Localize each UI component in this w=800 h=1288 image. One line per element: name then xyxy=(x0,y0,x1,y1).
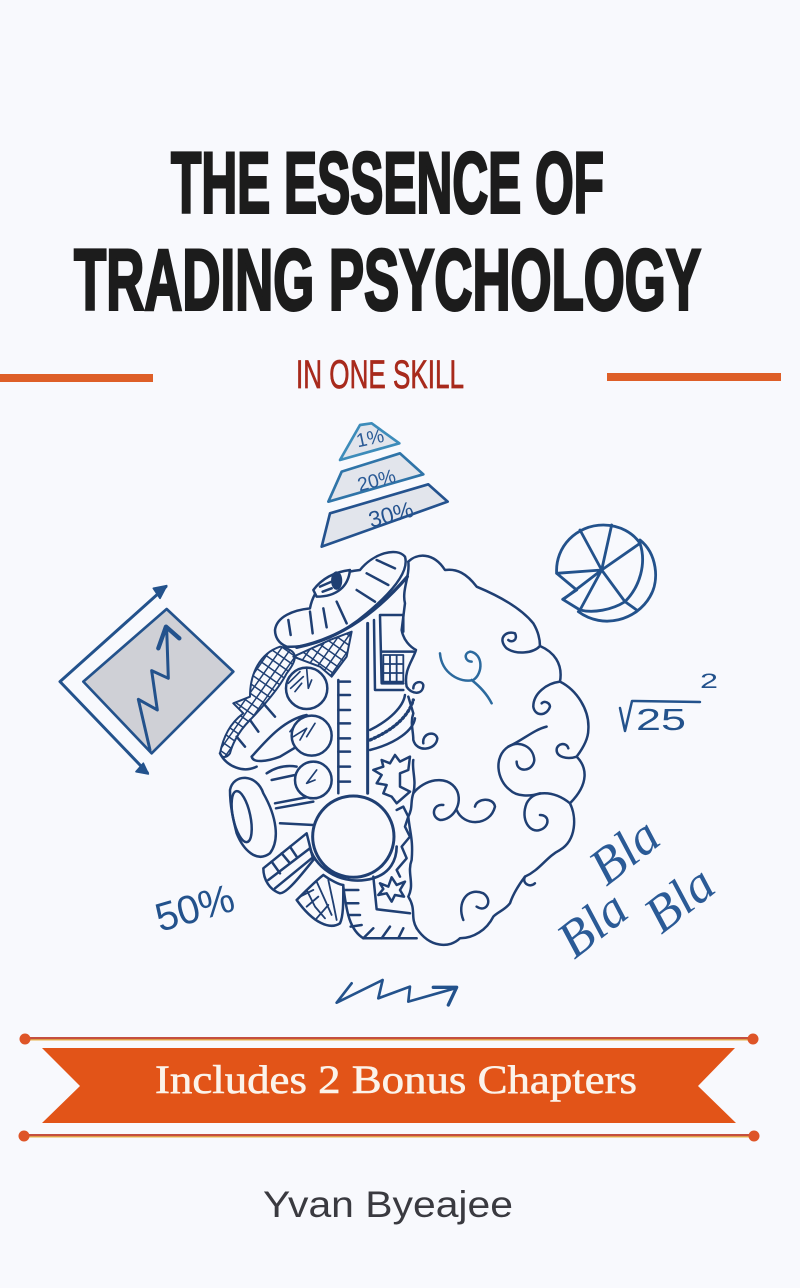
top banner rule with dots xyxy=(20,1034,758,1044)
banner text: Includes 2 Bonus Chapters xyxy=(155,1057,637,1102)
orange ribbon banner xyxy=(42,1048,736,1123)
author name: Yvan Byeajee xyxy=(263,1184,513,1225)
math note: squared root of 25: 2 xyxy=(700,670,718,693)
eye xyxy=(313,570,350,597)
control panel and grid xyxy=(374,615,413,690)
subtitle: in one skill: IN ONE SKILL xyxy=(296,353,464,397)
concentric arcs xyxy=(370,695,415,750)
pyramid tier 1 percent: 1% xyxy=(354,426,386,452)
handwritten bla bla bla: Bla xyxy=(634,855,726,944)
pyramid tier 20 percent: 20% xyxy=(355,466,398,496)
icon: pyramid chart xyxy=(322,423,448,547)
blue swirl xyxy=(440,652,492,703)
ruler column xyxy=(338,623,368,793)
right orange rule xyxy=(607,373,781,381)
large hub circle xyxy=(310,796,397,880)
top cap with ribs xyxy=(275,552,407,647)
icon: zigzag arrow xyxy=(337,980,457,1005)
right half: cloud brain outline xyxy=(408,556,588,945)
title xyxy=(74,136,701,328)
handwritten fifty percent: 50% xyxy=(150,876,239,941)
icon: pie chart xyxy=(557,525,656,621)
lens xyxy=(228,778,276,857)
pyramid tier 30 percent: 30% xyxy=(366,496,416,533)
bottom banner rule with dots xyxy=(18,1130,760,1142)
ribbed lower parts xyxy=(263,833,417,938)
gears xyxy=(373,755,410,913)
math note: squared root of 25: 25 xyxy=(636,702,686,737)
fingers xyxy=(220,668,332,825)
handwritten bla bla bla: Bla xyxy=(579,807,671,896)
left orange rule xyxy=(0,374,153,382)
math note: squared root of 25 xyxy=(620,670,718,737)
illustration: half mechanical half cloud brain xyxy=(220,552,588,945)
icon: line chart in diamond with arrows xyxy=(60,586,233,774)
centre dividing edge with spirals xyxy=(402,562,437,928)
handwritten bla bla bla: Bla xyxy=(547,880,639,969)
handwritten bla bla bla xyxy=(547,807,726,969)
mesh nets xyxy=(220,632,352,757)
